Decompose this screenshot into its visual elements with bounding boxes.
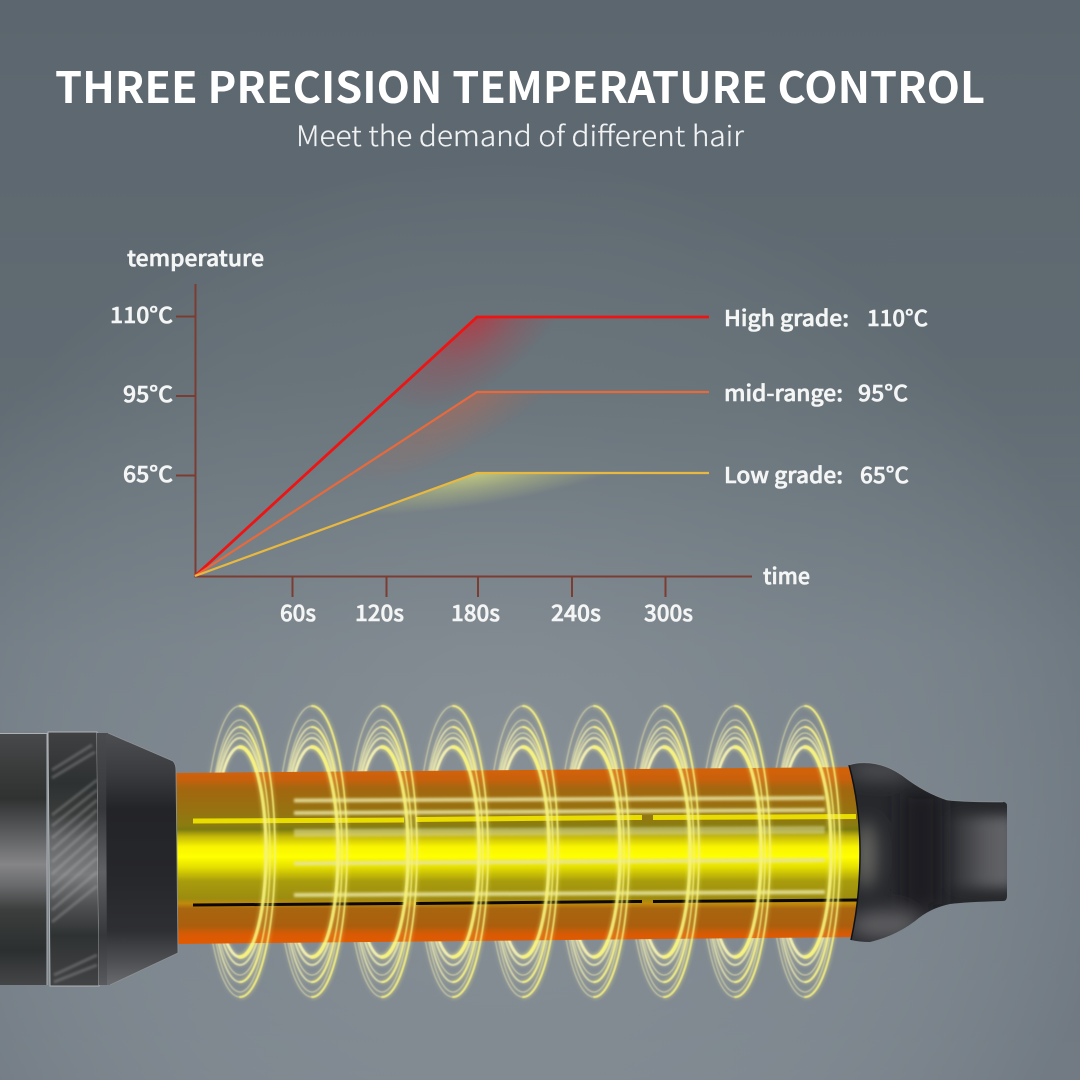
y tick labels: 65°C xyxy=(123,457,173,489)
yellow curve: low grade xyxy=(195,473,709,576)
series labels: 95°C xyxy=(858,376,908,408)
y tick labels xyxy=(110,298,173,489)
series labels: 110°C xyxy=(867,301,928,333)
series labels xyxy=(724,301,928,490)
x axis label: time xyxy=(763,559,810,591)
handle collar xyxy=(48,732,99,986)
red curve: high grade xyxy=(195,317,709,576)
x tick labels xyxy=(280,596,693,628)
y tick labels: 110°C xyxy=(110,298,173,330)
x tick labels: 120s xyxy=(355,596,404,628)
handle cone xyxy=(97,733,178,985)
y tick labels: 95°C xyxy=(123,377,173,409)
series labels: mid-range: xyxy=(724,376,843,408)
curling iron illustration xyxy=(0,706,1015,997)
heat shading under curves xyxy=(378,318,592,510)
nozzle tip xyxy=(846,760,1015,942)
heat rings xyxy=(205,706,840,997)
x tick labels: 240s xyxy=(551,596,601,628)
title: THREE PRECISION TEMPERATURE CONTROL xyxy=(55,54,985,116)
subtitle: Meet the demand of different hair xyxy=(296,115,745,155)
x tick labels: 180s xyxy=(451,596,500,628)
temperature chart xyxy=(110,241,928,628)
barrel highlight lines xyxy=(193,798,858,905)
heat rings in front of barrel xyxy=(240,706,840,997)
heat rings glow xyxy=(205,706,840,997)
handle body xyxy=(0,733,47,985)
glowing barrel xyxy=(174,767,862,944)
series labels: Low grade: xyxy=(724,458,843,490)
chart axes xyxy=(176,284,752,597)
x tick labels: 60s xyxy=(280,596,316,628)
series labels: 65°C xyxy=(860,458,909,490)
x tick labels: 300s xyxy=(644,596,693,628)
orange curve: mid-range xyxy=(195,392,709,576)
series labels: High grade: xyxy=(724,301,849,333)
y axis label: temperature xyxy=(127,241,264,273)
